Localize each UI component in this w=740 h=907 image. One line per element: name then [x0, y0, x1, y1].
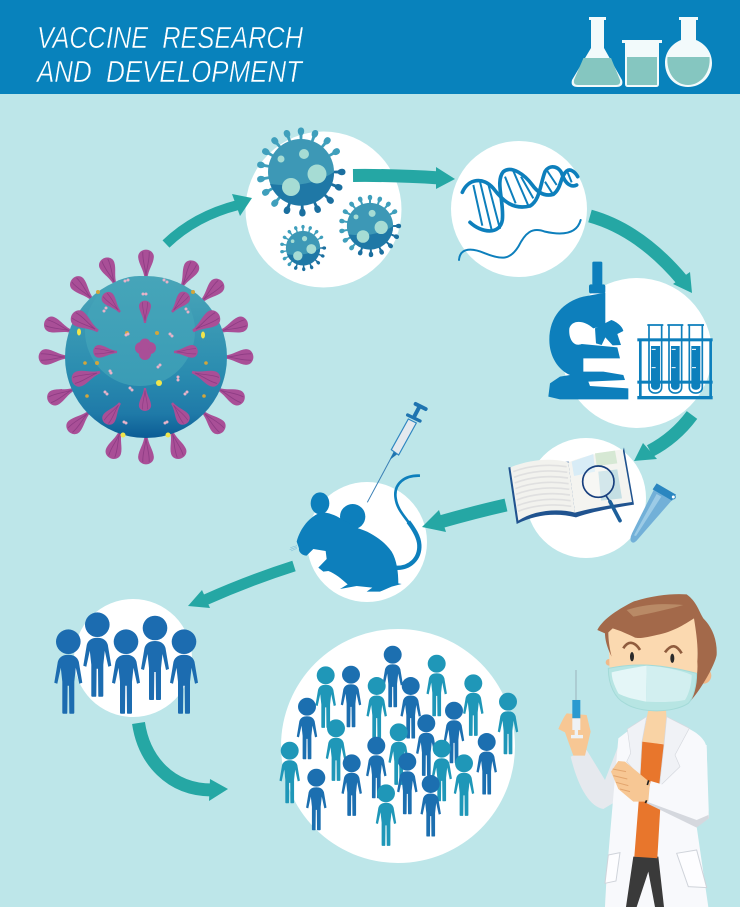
panel: crowd circle — [281, 629, 515, 863]
folded hand — [611, 761, 650, 803]
panel: microscope circle — [562, 278, 712, 428]
arrow: mouse to group — [188, 566, 294, 608]
icon: test tube rack — [637, 325, 713, 399]
sphere — [65, 276, 227, 438]
surface particles — [77, 278, 208, 438]
surface spikes — [68, 289, 223, 427]
raised arm sleeve — [571, 742, 620, 809]
title — [35, 20, 304, 89]
lab coat — [605, 717, 709, 907]
icon: microscope — [548, 262, 628, 399]
arrow: dna to microscope — [590, 216, 692, 293]
arrow: strains to dna — [353, 167, 455, 189]
ears — [606, 659, 612, 666]
arrow: group to crowd — [138, 723, 228, 801]
orange shirt — [634, 742, 664, 858]
icon: large coronavirus — [39, 250, 253, 464]
arrow: virus to strains — [166, 194, 252, 244]
doctor with mask and syringe — [558, 594, 717, 907]
title: VACCINE RESEARCH — [37, 20, 303, 55]
lapels — [659, 717, 689, 787]
panel: mouse circle — [307, 482, 427, 602]
mask — [608, 665, 697, 711]
arrow: notebook to mouse — [422, 505, 506, 532]
syringe in hand — [571, 670, 583, 738]
icon: syringe above mouse — [367, 404, 426, 502]
outer spikes — [39, 250, 253, 464]
icon: lab flasks — [572, 17, 712, 87]
neck — [642, 710, 668, 744]
raised hand — [558, 713, 591, 756]
panel: notebook circle — [526, 438, 646, 558]
forearm sleeve — [647, 785, 709, 828]
pockets — [677, 850, 707, 888]
people: large trial crowd — [279, 646, 518, 846]
title: AND DEVELOPMENT — [35, 54, 304, 89]
panel: dna circle — [451, 141, 587, 277]
panel: virus strains circle — [246, 132, 402, 288]
icon: three virus strains — [257, 128, 401, 271]
header banner — [0, 0, 740, 94]
arrow: microscope to notebook — [634, 415, 692, 461]
icon: open notebook with magnifier — [508, 447, 634, 524]
face — [608, 617, 698, 685]
panel: small group circle — [74, 599, 192, 717]
icon: sample tube — [630, 483, 676, 543]
people: small trial group — [54, 612, 198, 714]
eyes and brows — [623, 643, 682, 663]
pants — [626, 857, 664, 907]
icon: dna helix and rna strand — [459, 167, 581, 260]
icon: mouse silhouette — [290, 476, 420, 592]
central trefoil — [135, 338, 156, 360]
hair — [597, 594, 717, 703]
